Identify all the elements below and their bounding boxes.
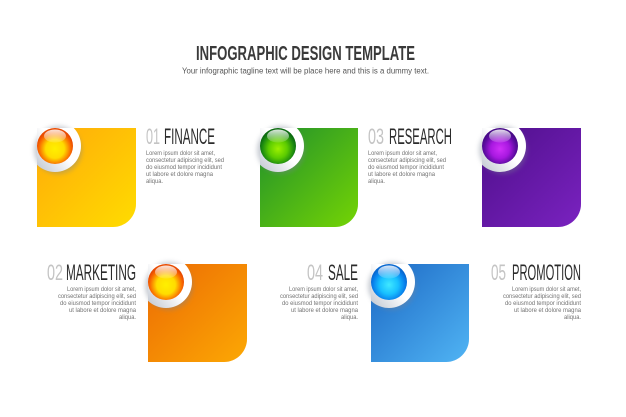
icon: purple ball <box>474 120 527 174</box>
text block: marketing: Lorem ipsum dolor sit amet, <box>67 286 136 293</box>
heading: 01 finance: 01 <box>146 124 160 149</box>
text block: promotion <box>503 286 582 321</box>
panel: purple card <box>474 120 581 227</box>
text block: sale: do eiusmod tempor incididunt <box>282 300 358 307</box>
icon: orange ball <box>140 256 193 310</box>
text block: marketing: ut labore et dolore magna <box>69 307 137 314</box>
text block: promotion: ut labore et dolore magna <box>514 307 582 314</box>
icon: blue ball <box>363 256 416 310</box>
text block: sale: consectetur adipiscing elit, sed <box>280 293 359 300</box>
heading: 01 finance: FINANCE <box>164 124 215 149</box>
text block: research: consectetur adipiscing elit, sed <box>368 157 447 164</box>
text block: marketing: consectetur adipiscing elit, sed <box>58 293 137 300</box>
icon: green ball <box>252 120 305 174</box>
text block: research <box>368 150 447 185</box>
card: orange <box>148 264 247 362</box>
text block: finance: consectetur adipiscing elit, sed <box>146 157 225 164</box>
panel: marketing <box>47 256 247 362</box>
text block: finance: aliqua. <box>146 178 163 185</box>
panel: promotion <box>491 260 582 321</box>
heading: 04 sale <box>307 260 358 285</box>
text block: finance: Lorem ipsum dolor sit amet, <box>146 150 215 157</box>
text block: sale: ut labore et dolore magna <box>291 307 359 314</box>
heading: 02 marketing <box>47 260 136 285</box>
heading: 03 research <box>368 124 452 149</box>
tagline: Your infographic tagline text will be place here and this is a dummy text. <box>182 66 429 76</box>
card: green <box>260 128 358 227</box>
text block: promotion: aliqua. <box>564 314 581 321</box>
text block: marketing: do eiusmod tempor incididunt <box>60 300 136 307</box>
card: purple <box>482 128 581 227</box>
text block: finance: do eiusmod tempor incididunt <box>146 164 222 171</box>
heading: 01 finance <box>146 124 215 149</box>
heading: 03 research: RESEARCH <box>389 124 452 149</box>
text block: finance <box>146 150 225 185</box>
text block: research: do eiusmod tempor incididunt <box>368 164 444 171</box>
heading: 05 promotion: 05 <box>491 260 506 285</box>
panel: sale <box>280 256 469 362</box>
text block: sale: Lorem ipsum dolor sit amet, <box>289 286 358 293</box>
text block: promotion: do eiusmod tempor incididunt <box>505 300 581 307</box>
card: yellow <box>37 128 136 227</box>
text block: research: aliqua. <box>368 178 385 185</box>
text block: marketing <box>58 286 137 321</box>
title: INFOGRAPHIC DESIGN TEMPLATE <box>196 43 415 65</box>
text block: sale: aliqua. <box>341 314 358 321</box>
heading: 02 marketing: 02 <box>47 260 63 285</box>
text block: marketing: aliqua. <box>119 314 136 321</box>
card: blue <box>371 264 469 362</box>
panel: research <box>252 120 452 227</box>
text block: promotion: Lorem ipsum dolor sit amet, <box>512 286 581 293</box>
text block: research: Lorem ipsum dolor sit amet, <box>368 150 437 157</box>
heading: 04 sale: 04 <box>307 260 323 285</box>
heading: 03 research: 03 <box>368 124 384 149</box>
text block: finance: ut labore et dolore magna <box>146 171 214 178</box>
icon: yellow ball <box>29 120 82 174</box>
heading: 04 sale: SALE <box>328 260 358 285</box>
panel: finance <box>29 120 225 227</box>
heading: 02 marketing: MARKETING <box>66 260 136 285</box>
heading: 05 promotion <box>491 260 581 285</box>
text block: sale <box>280 286 359 321</box>
text block: research: ut labore et dolore magna <box>368 171 436 178</box>
text block: promotion: consectetur adipiscing elit, sed <box>503 293 582 300</box>
